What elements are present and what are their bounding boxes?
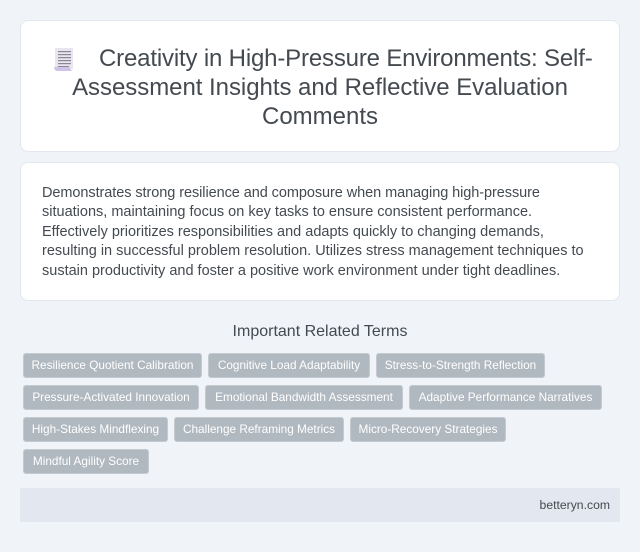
chip [350,417,506,442]
chip [208,353,370,378]
title card: Comments [262,103,378,130]
summary card: Demonstrates strong resilience and composure when managing high-pressure [42,185,540,201]
chip: Cognitive Load Adaptability [218,358,360,372]
footer source text: betteryn.com [540,498,610,512]
title card: Creativity in High-Pressure Environments: Self- [99,45,593,72]
chip: Adaptive Performance Narratives [419,390,592,404]
footer bar [20,488,620,522]
chip [23,449,149,474]
title heading [72,45,593,130]
chip: Emotional Bandwidth Assessment [215,390,393,404]
chip [174,417,344,442]
chip [23,417,168,442]
chip [409,385,602,410]
chip [376,353,545,378]
icon: document scroll [54,48,73,71]
title card [20,20,620,152]
term chips [23,353,602,474]
summary card [20,162,620,301]
chip: Challenge Reframing Metrics [183,422,335,436]
summary card: Effectively prioritizes responsibilities and adapts quickly to changing demands, [42,224,544,240]
summary paragraph [42,185,584,279]
chip [23,385,199,410]
chip [23,353,202,378]
summary card: situations, maintaining focus on key tasks to ensure consistent performance. [42,204,532,220]
chip: Micro-Recovery Strategies [358,422,497,436]
chip: High-Stakes Mindflexing [32,422,159,436]
chip: Mindful Agility Score [33,454,139,468]
section heading: related terms: Important Related Terms [233,323,407,340]
summary card: resulting in successful problem resolution. Utilizes stress management techniques to [42,243,584,259]
chip: Resilience Quotient Calibration [32,358,193,372]
title card: Assessment Insights and Reflective Evaluation [72,74,568,101]
chip [205,385,403,410]
chip: Pressure-Activated Innovation [32,390,190,404]
summary card: sustain productivity and foster a positive work environment under tight deadlines. [42,263,560,279]
chip: Stress-to-Strength Reflection [385,358,536,372]
